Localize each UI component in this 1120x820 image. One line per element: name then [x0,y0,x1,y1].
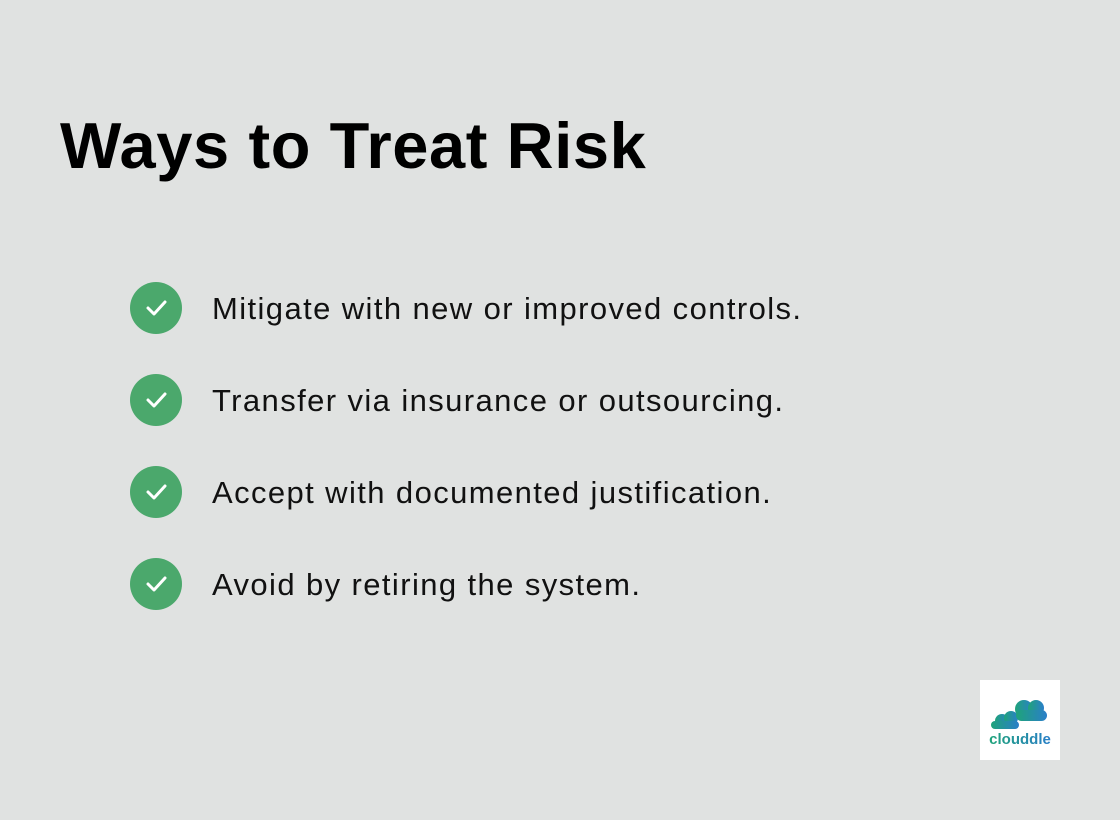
item 1 [130,282,802,334]
logo: clouddle [980,680,1060,760]
logo: clouddle: clouddle [989,731,1051,748]
icon: check [130,466,182,518]
item 3 [130,466,772,518]
icon: clouds [991,700,1047,729]
text 4: Avoid by retiring the system. [212,567,641,602]
icon: check [130,374,182,426]
title: Ways to Treat Risk [60,109,646,182]
text 1: Mitigate with new or improved controls. [212,291,802,326]
text 3: Accept with documented justification. [212,475,772,510]
item 2 [130,374,784,426]
text 2: Transfer via insurance or outsourcing. [212,383,784,418]
icon: check [130,558,182,610]
icon: check [130,282,182,334]
item 4 [130,558,641,610]
